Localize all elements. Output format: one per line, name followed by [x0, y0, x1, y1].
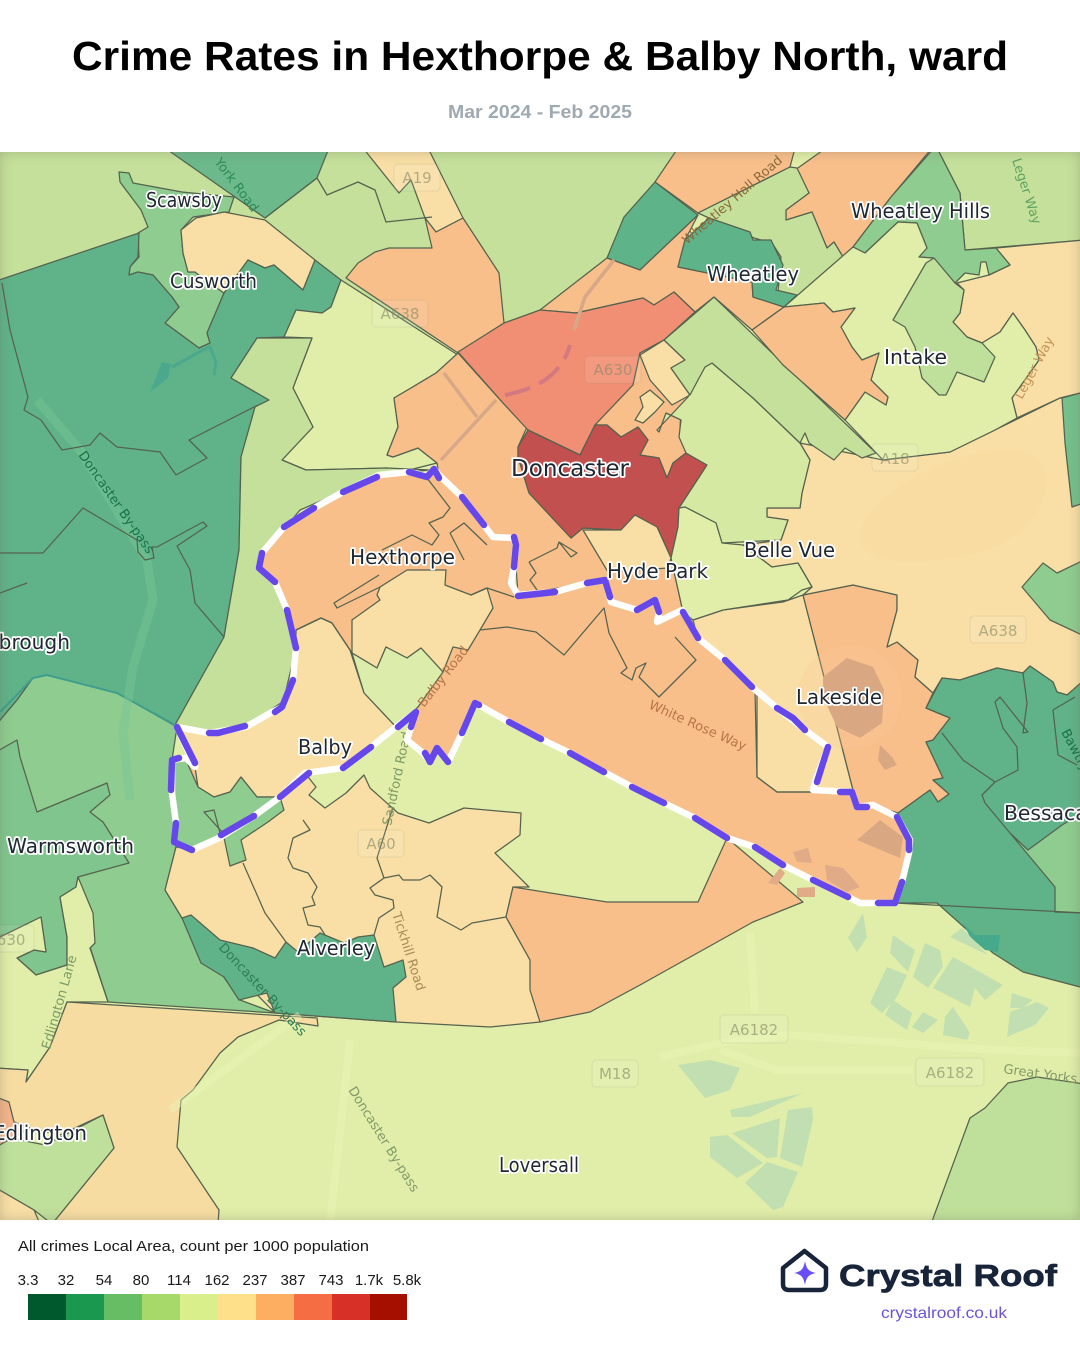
- legend tick labels: 743: [318, 1272, 344, 1289]
- place label: Lakeside: Lakeside: [796, 685, 882, 709]
- region: Doncaster centre dark red: [518, 425, 707, 558]
- website url: crystalroof.co.uk: [881, 1305, 1008, 1322]
- road label: Leger Way north: Leger Way: [1008, 157, 1044, 227]
- legend tick labels: 162: [204, 1272, 230, 1289]
- region: Scawsby medium green: [119, 172, 234, 348]
- region: A19 tan: [363, 148, 463, 232]
- title: Crime Rates in Hexthorpe & Balby North, ward: [72, 33, 1008, 79]
- subtitle: date range: Mar 2024 - Feb 2025: [448, 102, 632, 122]
- place label: Scawsby: Scawsby: [146, 188, 222, 212]
- road labels: [39, 153, 1080, 1195]
- map edge vignette: [0, 152, 1080, 1220]
- shield: A630: [585, 356, 641, 383]
- place label: Loversall: Loversall: [499, 1153, 579, 1177]
- region: north-east light green: [937, 148, 1080, 250]
- region: Hexthorpe and Balby North ward orange fill: [172, 469, 910, 903]
- shield: A638 east: [970, 616, 1026, 643]
- region: south-west tan: [0, 1002, 318, 1224]
- region: Intake orange: [752, 303, 888, 420]
- region: Doncaster north salmon: [458, 292, 695, 455]
- place label: Warmsworth: Warmsworth: [7, 834, 134, 858]
- region: west dark green: [0, 233, 341, 725]
- legend tick labels: 387: [280, 1272, 306, 1289]
- place label: Cusworth: Cusworth: [170, 269, 257, 293]
- road label: Doncaster By-pass south: Doncaster By-pass: [345, 1084, 422, 1195]
- industrial blob: [857, 820, 903, 858]
- retail park and lake shapes: [678, 913, 1049, 1210]
- road label: Balby Road: Balby Road: [415, 644, 472, 710]
- region: Edlington orange: [0, 1097, 30, 1147]
- place label: Wheatley: Wheatley: [707, 262, 799, 286]
- place labels: [0, 188, 1080, 1177]
- road label: White Rose Way: White Rose Way: [646, 698, 749, 754]
- region: east green patch: [1022, 560, 1080, 636]
- road label: Leger Way south: Leger Way: [1012, 334, 1058, 402]
- legend tick labels: 114: [167, 1272, 191, 1289]
- Balby top boundary: [296, 618, 352, 653]
- region: south orange: [506, 838, 803, 1022]
- Lakeside wedge boundary: [757, 695, 812, 792]
- region: Bessacarr medium green: [1010, 812, 1080, 913]
- shield: A638 north: [372, 300, 428, 327]
- region: south tan belt: [165, 773, 540, 1027]
- western by-pass band: [37, 400, 153, 800]
- lighter road bands: [170, 933, 1080, 1224]
- region: east right-edge green: [1062, 392, 1080, 507]
- shield: A638 east: A638: [979, 622, 1017, 640]
- region: Balby tan: [177, 618, 396, 797]
- place label: Alverley: Alverley: [297, 936, 375, 960]
- region: Wheatley light green: [698, 167, 843, 297]
- legend tick labels: 237: [242, 1272, 268, 1289]
- road label: Sandford Road: Sandford Road: [380, 730, 415, 827]
- white boundary line: [172, 469, 910, 903]
- river south boundary: [0, 675, 175, 725]
- region: Lakeside orange: [803, 585, 950, 813]
- region: Intake light green: [893, 258, 995, 395]
- place label: Hexthorpe: Hexthorpe: [350, 545, 455, 569]
- place label: Doncaster: Doncaster: [511, 456, 630, 482]
- shield: A6182 east: [916, 1058, 984, 1086]
- legend colour scale: [28, 1294, 407, 1320]
- legend tick labels: 1.7k: [355, 1272, 384, 1289]
- land use details: [0, 260, 1080, 1224]
- stadium ring: [798, 645, 902, 749]
- place label: Hyde Park: Hyde Park: [607, 559, 708, 583]
- shield: A638 north: A638: [381, 305, 419, 323]
- region: south-west medium green: [0, 675, 275, 1013]
- map: crime rate choropleth: [0, 152, 1080, 1220]
- region: central yellow-green: [282, 280, 458, 470]
- place label: Balby: Balby: [298, 735, 352, 759]
- ward boundary: Hexthorpe and Balby North: [171, 469, 910, 903]
- shield: M18: [592, 1060, 638, 1087]
- shield: A6182 centre: A6182: [730, 1021, 778, 1039]
- region: diagonal light green: [664, 297, 876, 460]
- place label: Wheatley Hills: Wheatley Hills: [851, 199, 990, 223]
- region: Balby yellow-green: [352, 647, 443, 727]
- grey rail lines: [441, 260, 614, 460]
- region: small tan north-east of Doncaster: [640, 340, 690, 405]
- region: central north orange: [387, 353, 683, 622]
- icon: house with star: [783, 1251, 826, 1290]
- shield: A60: [358, 830, 404, 857]
- east pond: [963, 923, 1000, 952]
- region: Intake yellow-green: [784, 222, 1039, 460]
- region: Hyde Park tan: [583, 515, 671, 572]
- region: Belle Vue north yellow-green: [657, 363, 810, 543]
- road label: Tickhill Road: Tickhill Road: [388, 910, 428, 993]
- road label: Edlington Lane: Edlington Lane: [39, 954, 81, 1051]
- region: south-east light green: [931, 1077, 1080, 1224]
- region: Wheatley Hall Road orange: [655, 148, 795, 213]
- logo: Crystal Roof: [780, 1248, 1058, 1322]
- north inner boundary: [265, 178, 432, 222]
- region: Edlington Lane yellow-green: [0, 877, 108, 1082]
- region: top-right orange: [786, 148, 932, 257]
- legend tick labels: 3.3: [18, 1272, 38, 1289]
- region: Balby green patch: [172, 760, 284, 866]
- region: orange north of Doncaster: [540, 215, 784, 330]
- legend title: All crimes Local Area, count per 1000 population: [18, 1238, 369, 1255]
- region: Wheatley dark green: [678, 218, 797, 307]
- lakeside pond: [878, 745, 897, 770]
- legend tick labels: 5.8k: [393, 1272, 422, 1289]
- shield: A19: [394, 164, 440, 191]
- region: Alverley dark green: [182, 915, 406, 1022]
- region: north-east tan: [953, 240, 1080, 418]
- shield: A6182 centre: [720, 1015, 788, 1043]
- base land: [0, 152, 1080, 1220]
- stadium blob: [823, 658, 884, 738]
- purple dashes: [171, 469, 909, 903]
- logo wordmark: Crystal Roof: [839, 1258, 1058, 1293]
- south tan boundaries: [243, 807, 506, 942]
- shield: A19: A19: [402, 169, 432, 187]
- region: Warmsworth darker green: [0, 740, 129, 975]
- industrial blobs south: [768, 848, 860, 897]
- Bessacarr boundaries: [942, 673, 1077, 833]
- shield: A18: [872, 444, 918, 471]
- shield: A630 west: [0, 925, 34, 952]
- White Rose inner boundary: [480, 608, 696, 697]
- region: small tan pocket: [635, 390, 664, 423]
- lake west: [150, 362, 171, 392]
- region: north light green: [0, 148, 700, 600]
- region: river-side light green strip: [175, 338, 430, 733]
- west parcel boundary: [0, 508, 224, 637]
- region: Wheatley Hills medium green: [853, 148, 1010, 283]
- shield: M18: M18: [599, 1065, 631, 1083]
- road label: Doncaster By-pass west: Doncaster By-pass: [75, 449, 157, 557]
- legend: [18, 1238, 422, 1320]
- area polygons: [0, 148, 1080, 1224]
- region: Edlington light green: [0, 1115, 114, 1224]
- place label: Intake: Intake: [884, 345, 947, 369]
- road label: Doncaster By-pass south-west: Doncaster By-pass: [215, 940, 309, 1040]
- shield: A630: A630: [594, 361, 632, 379]
- west inner boundary: [2, 283, 258, 475]
- road label: York Road: York Road: [210, 155, 261, 215]
- Hexthorpe inner boundary: [334, 478, 514, 608]
- shield: A6182 east: A6182: [926, 1064, 974, 1082]
- region: east tan: [743, 392, 1080, 695]
- legend tick labels: 54: [96, 1272, 112, 1289]
- region: east dark green: [895, 666, 1080, 988]
- legend tick labels: 32: [58, 1272, 74, 1289]
- region: orange east of Doncaster: [595, 340, 707, 478]
- purple road: [505, 345, 570, 395]
- neighbourhood boundaries inside regions: [0, 178, 1080, 942]
- place label: Belle Vue: Belle Vue: [744, 538, 835, 562]
- region: top dark green: [165, 148, 329, 218]
- region: north orange: [346, 218, 504, 353]
- legend tick labels: [18, 1272, 422, 1289]
- south-east boundary: [895, 903, 1080, 913]
- road label: Wheatley Hall Road: Wheatley Hall Road: [680, 153, 786, 248]
- road shields: [0, 164, 1026, 1087]
- region: Cusworth tan: [181, 212, 315, 293]
- Hyde Park inner boundary: [529, 542, 577, 590]
- region: central tan: [352, 570, 493, 672]
- river west: [172, 347, 216, 375]
- legend tick labels: 80: [133, 1272, 149, 1289]
- shield: A60: A60: [366, 835, 396, 853]
- region: Belle Vue south yellow-green: [671, 507, 812, 620]
- shield: A18: A18: [880, 450, 910, 468]
- region: river dark green: [607, 182, 698, 270]
- airport shading: [859, 450, 1046, 561]
- region: bottom-left tan corner: [0, 1188, 40, 1224]
- road label: Great Yorkshire: Great Yorks: [1002, 1062, 1078, 1087]
- region: Lakeside tan wedge: [693, 595, 853, 792]
